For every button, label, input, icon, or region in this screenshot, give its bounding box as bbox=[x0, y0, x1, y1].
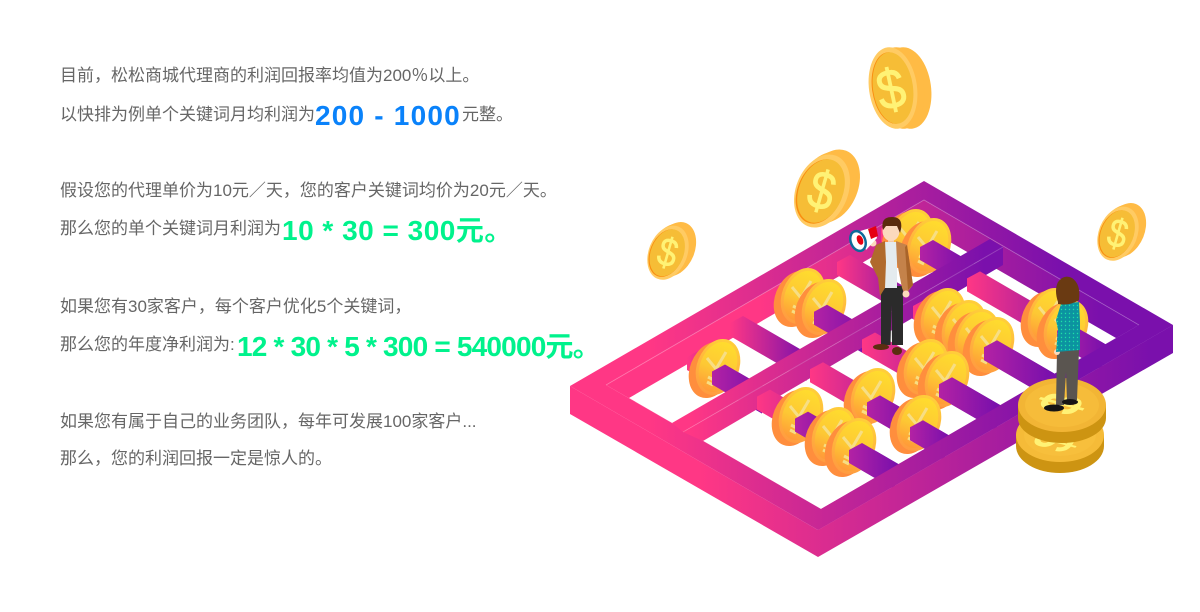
coin stack: $ bbox=[1018, 426, 1090, 457]
text: monthly profit: 那么您的单个关键词月利润为 bbox=[60, 219, 281, 238]
floating coin: right bbox=[1090, 197, 1154, 267]
floating coin: middle bbox=[784, 141, 870, 236]
text: conclusion: 那么，您的利润回报一定是惊人的。 bbox=[60, 449, 332, 468]
text: team scenario: 如果您有属于自己的业务团队，每年可发展100家客户... bbox=[60, 412, 477, 431]
floating coin: top bbox=[864, 44, 936, 132]
highlight: annual formula: 12 * 30 * 5 * 300 = 540000元。 bbox=[237, 331, 600, 362]
text: current return rate: 目前，松松商城代理商的利润回报率均值为200％以上。 bbox=[60, 66, 479, 85]
highlight: 200 - 1000: 200 - 1000 bbox=[315, 100, 461, 131]
coin stack: $ bbox=[1025, 388, 1097, 419]
text block: profit explanation bbox=[60, 66, 600, 468]
woman standing on coins bbox=[1044, 277, 1080, 412]
text: annual profit: 那么您的年度净利润为: bbox=[60, 335, 235, 354]
floating coin: top: $ bbox=[871, 57, 911, 123]
text: price assumption: 假设您的代理单价为10元／天，您的客户关键词均价为20元／天。 bbox=[60, 181, 557, 200]
frame front bar bbox=[818, 325, 1173, 557]
text: customer assumption: 如果您有30家客户，每个客户优化5个关键词， bbox=[60, 297, 411, 316]
highlight: monthly formula: 10 * 30 = 300元。 bbox=[282, 215, 513, 246]
man with megaphone bbox=[846, 217, 913, 355]
upper rods and beads bbox=[681, 202, 975, 414]
coin stack bbox=[1016, 378, 1106, 473]
centre beam bbox=[672, 239, 1003, 441]
abacus frame bbox=[570, 181, 1173, 557]
floating coin: left bbox=[640, 216, 704, 286]
text: yuan suffix: 元整。 bbox=[462, 105, 513, 124]
lower rods and beads bbox=[757, 271, 1115, 490]
text: per keyword profit: 以快排为例单个关键词月均利润为 bbox=[60, 105, 315, 124]
